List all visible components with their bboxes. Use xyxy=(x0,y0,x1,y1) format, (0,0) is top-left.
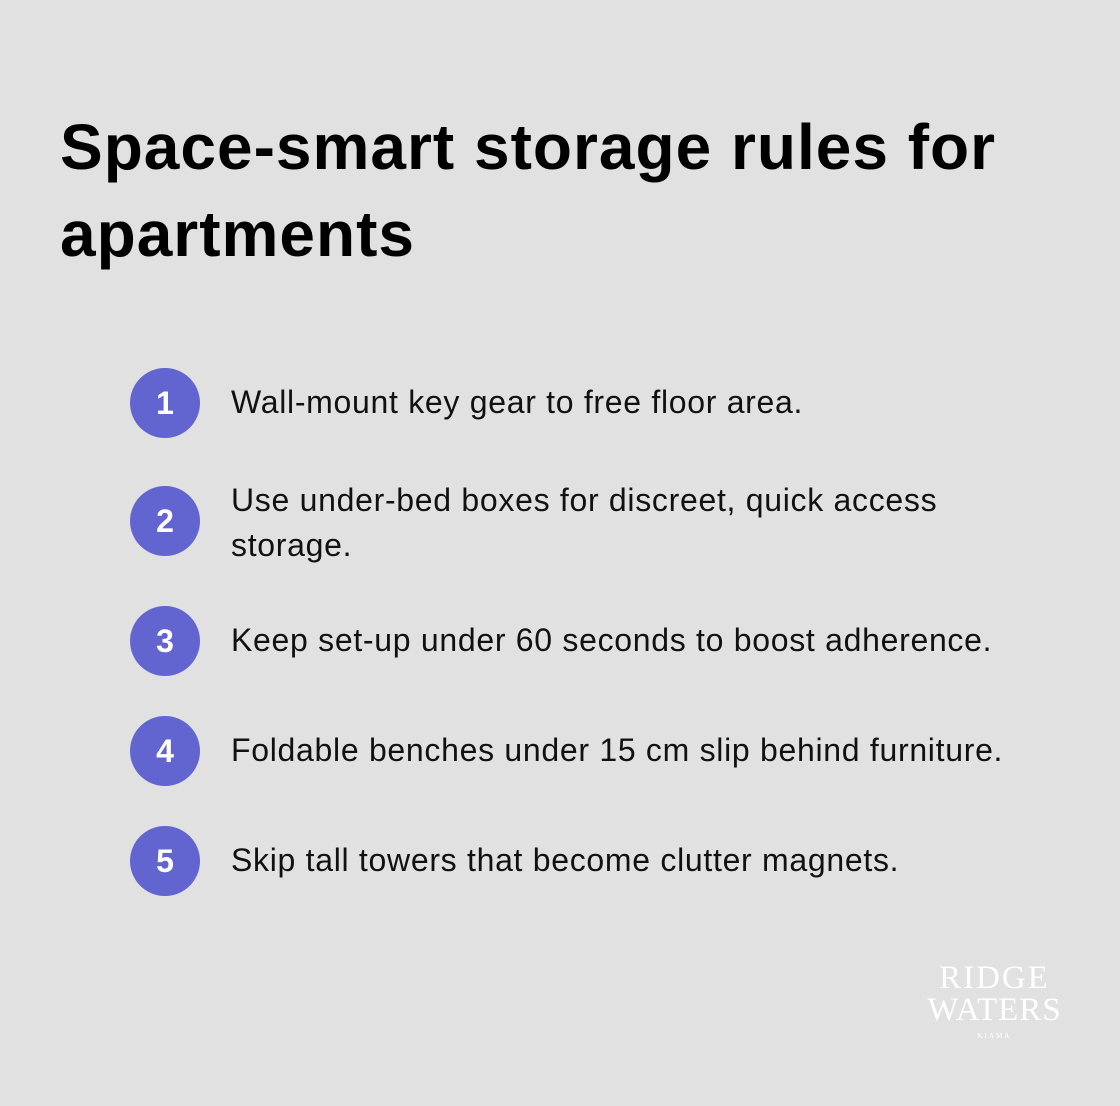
logo: WATERS xyxy=(927,992,1062,1028)
badge 2: 2 xyxy=(156,503,174,539)
badge 5: 5 xyxy=(156,843,174,879)
logo xyxy=(927,960,1062,1040)
item 2 xyxy=(130,482,937,563)
text 5: Skip tall towers that become clutter magnets. xyxy=(231,842,899,878)
title: Space-smart storage rules for xyxy=(60,111,996,183)
badge 5 xyxy=(130,826,200,896)
text 1: Wall-mount key gear to free floor area. xyxy=(231,384,803,420)
item 5 xyxy=(130,826,899,896)
badge 3 xyxy=(130,606,200,676)
badge 4 xyxy=(130,716,200,786)
logo: RIDGE xyxy=(939,960,1050,996)
item 4 xyxy=(130,716,1003,786)
logo: KIAMA xyxy=(978,1032,1011,1040)
badge 4: 4 xyxy=(156,733,174,769)
item 1 xyxy=(130,368,803,438)
badge 3: 3 xyxy=(156,623,174,659)
badge 1: 1 xyxy=(156,385,174,421)
text 3: Keep set-up under 60 seconds to boost adherence. xyxy=(231,622,992,658)
badge 1 xyxy=(130,368,200,438)
text 4: Foldable benches under 15 cm slip behind furniture. xyxy=(231,732,1003,768)
badge 2 xyxy=(130,486,200,556)
text 2 xyxy=(231,482,937,563)
title: apartments xyxy=(60,198,415,270)
item 3 xyxy=(130,606,992,676)
text 2: Use under-bed boxes for discreet, quick access xyxy=(231,482,937,518)
title xyxy=(60,111,996,270)
text 2: storage. xyxy=(231,527,352,563)
